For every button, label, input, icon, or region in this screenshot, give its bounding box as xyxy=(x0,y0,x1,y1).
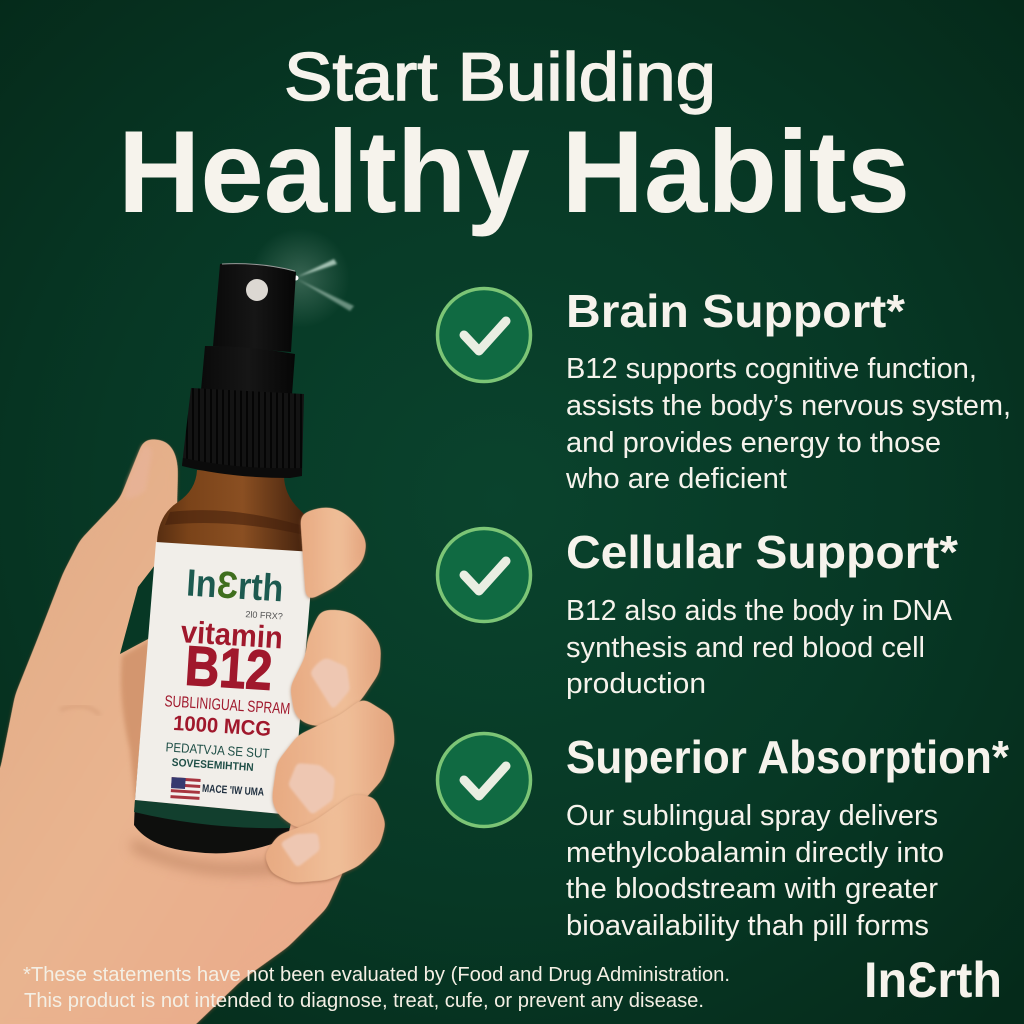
fingers xyxy=(264,507,395,883)
collar xyxy=(201,346,295,395)
ring fingernail xyxy=(288,763,335,815)
flag xyxy=(170,777,201,801)
body: and provides energy to those xyxy=(566,427,941,459)
heading: Superior Absorption* xyxy=(566,731,1009,783)
middle finger xyxy=(290,610,381,726)
logo: InƐrth xyxy=(864,952,1002,1008)
disclaimer: *These statements have not been evaluated by (Food and Drug Administration. xyxy=(23,964,730,986)
nozzle xyxy=(246,279,268,301)
middle fingernail xyxy=(310,658,350,710)
ribbed cap xyxy=(182,388,304,476)
benefit: cellular support xyxy=(438,526,958,700)
body: synthesis and red blood cell xyxy=(566,632,925,664)
label: SUBLINIGUAL SPRAM xyxy=(164,693,291,718)
title: Start Building xyxy=(284,39,716,115)
index finger xyxy=(300,507,366,602)
label: vitamin xyxy=(180,614,284,656)
body: assists the body’s nervous system, xyxy=(566,390,1011,422)
label: 1000 MCG xyxy=(172,712,272,741)
hand: palm and thumb xyxy=(0,439,345,1024)
brand: InƐrth xyxy=(185,562,285,610)
bottle xyxy=(134,264,314,853)
label: MACE 'IW UMA xyxy=(202,783,264,799)
amber glass xyxy=(135,470,314,815)
label: 2l0 FRX? xyxy=(245,609,283,621)
body xyxy=(566,595,953,700)
label: PEDATVJA SE SUT xyxy=(165,739,270,761)
body: B12 also aids the body in DNA xyxy=(566,595,953,627)
body: Our sublingual spray delivers xyxy=(566,800,938,832)
body: production xyxy=(566,668,706,700)
ring finger xyxy=(272,698,395,829)
gap between thumb and palm xyxy=(120,565,160,654)
label: SOVESEMIHTHN xyxy=(171,757,254,774)
icon: check xyxy=(438,734,530,826)
body: bioavailability thah pill forms xyxy=(566,910,929,942)
cap base ring xyxy=(182,458,302,478)
benefit: superior absorption xyxy=(438,731,1009,942)
base band xyxy=(134,800,292,853)
title xyxy=(118,39,910,237)
body: methylcobalamin directly into xyxy=(566,837,944,869)
body: B12 supports cognitive function, xyxy=(566,353,977,385)
label xyxy=(135,542,314,815)
title: Healthy Habits xyxy=(118,106,910,237)
little fingernail xyxy=(280,833,320,868)
body xyxy=(566,800,944,942)
benefit: brain support xyxy=(438,285,1011,495)
little finger xyxy=(264,794,386,883)
icon: check xyxy=(438,528,530,622)
sprayer actuator xyxy=(213,264,296,352)
spray mist xyxy=(250,228,354,328)
body xyxy=(565,353,1011,495)
palm shadow under bottle xyxy=(130,838,290,876)
heading: Brain Support* xyxy=(566,285,905,337)
disclaimer: This product is not intended to diagnose, treat, cufe, or prevent any disease. xyxy=(24,990,704,1012)
icon: check xyxy=(438,288,530,382)
palm shadow beside bottle xyxy=(121,640,150,800)
heading: Cellular Support* xyxy=(566,526,958,578)
body: who are deficient xyxy=(565,463,787,495)
disclaimer xyxy=(23,964,730,1012)
body: the bloodstream with greater xyxy=(566,873,938,905)
label: B12 xyxy=(183,634,274,702)
